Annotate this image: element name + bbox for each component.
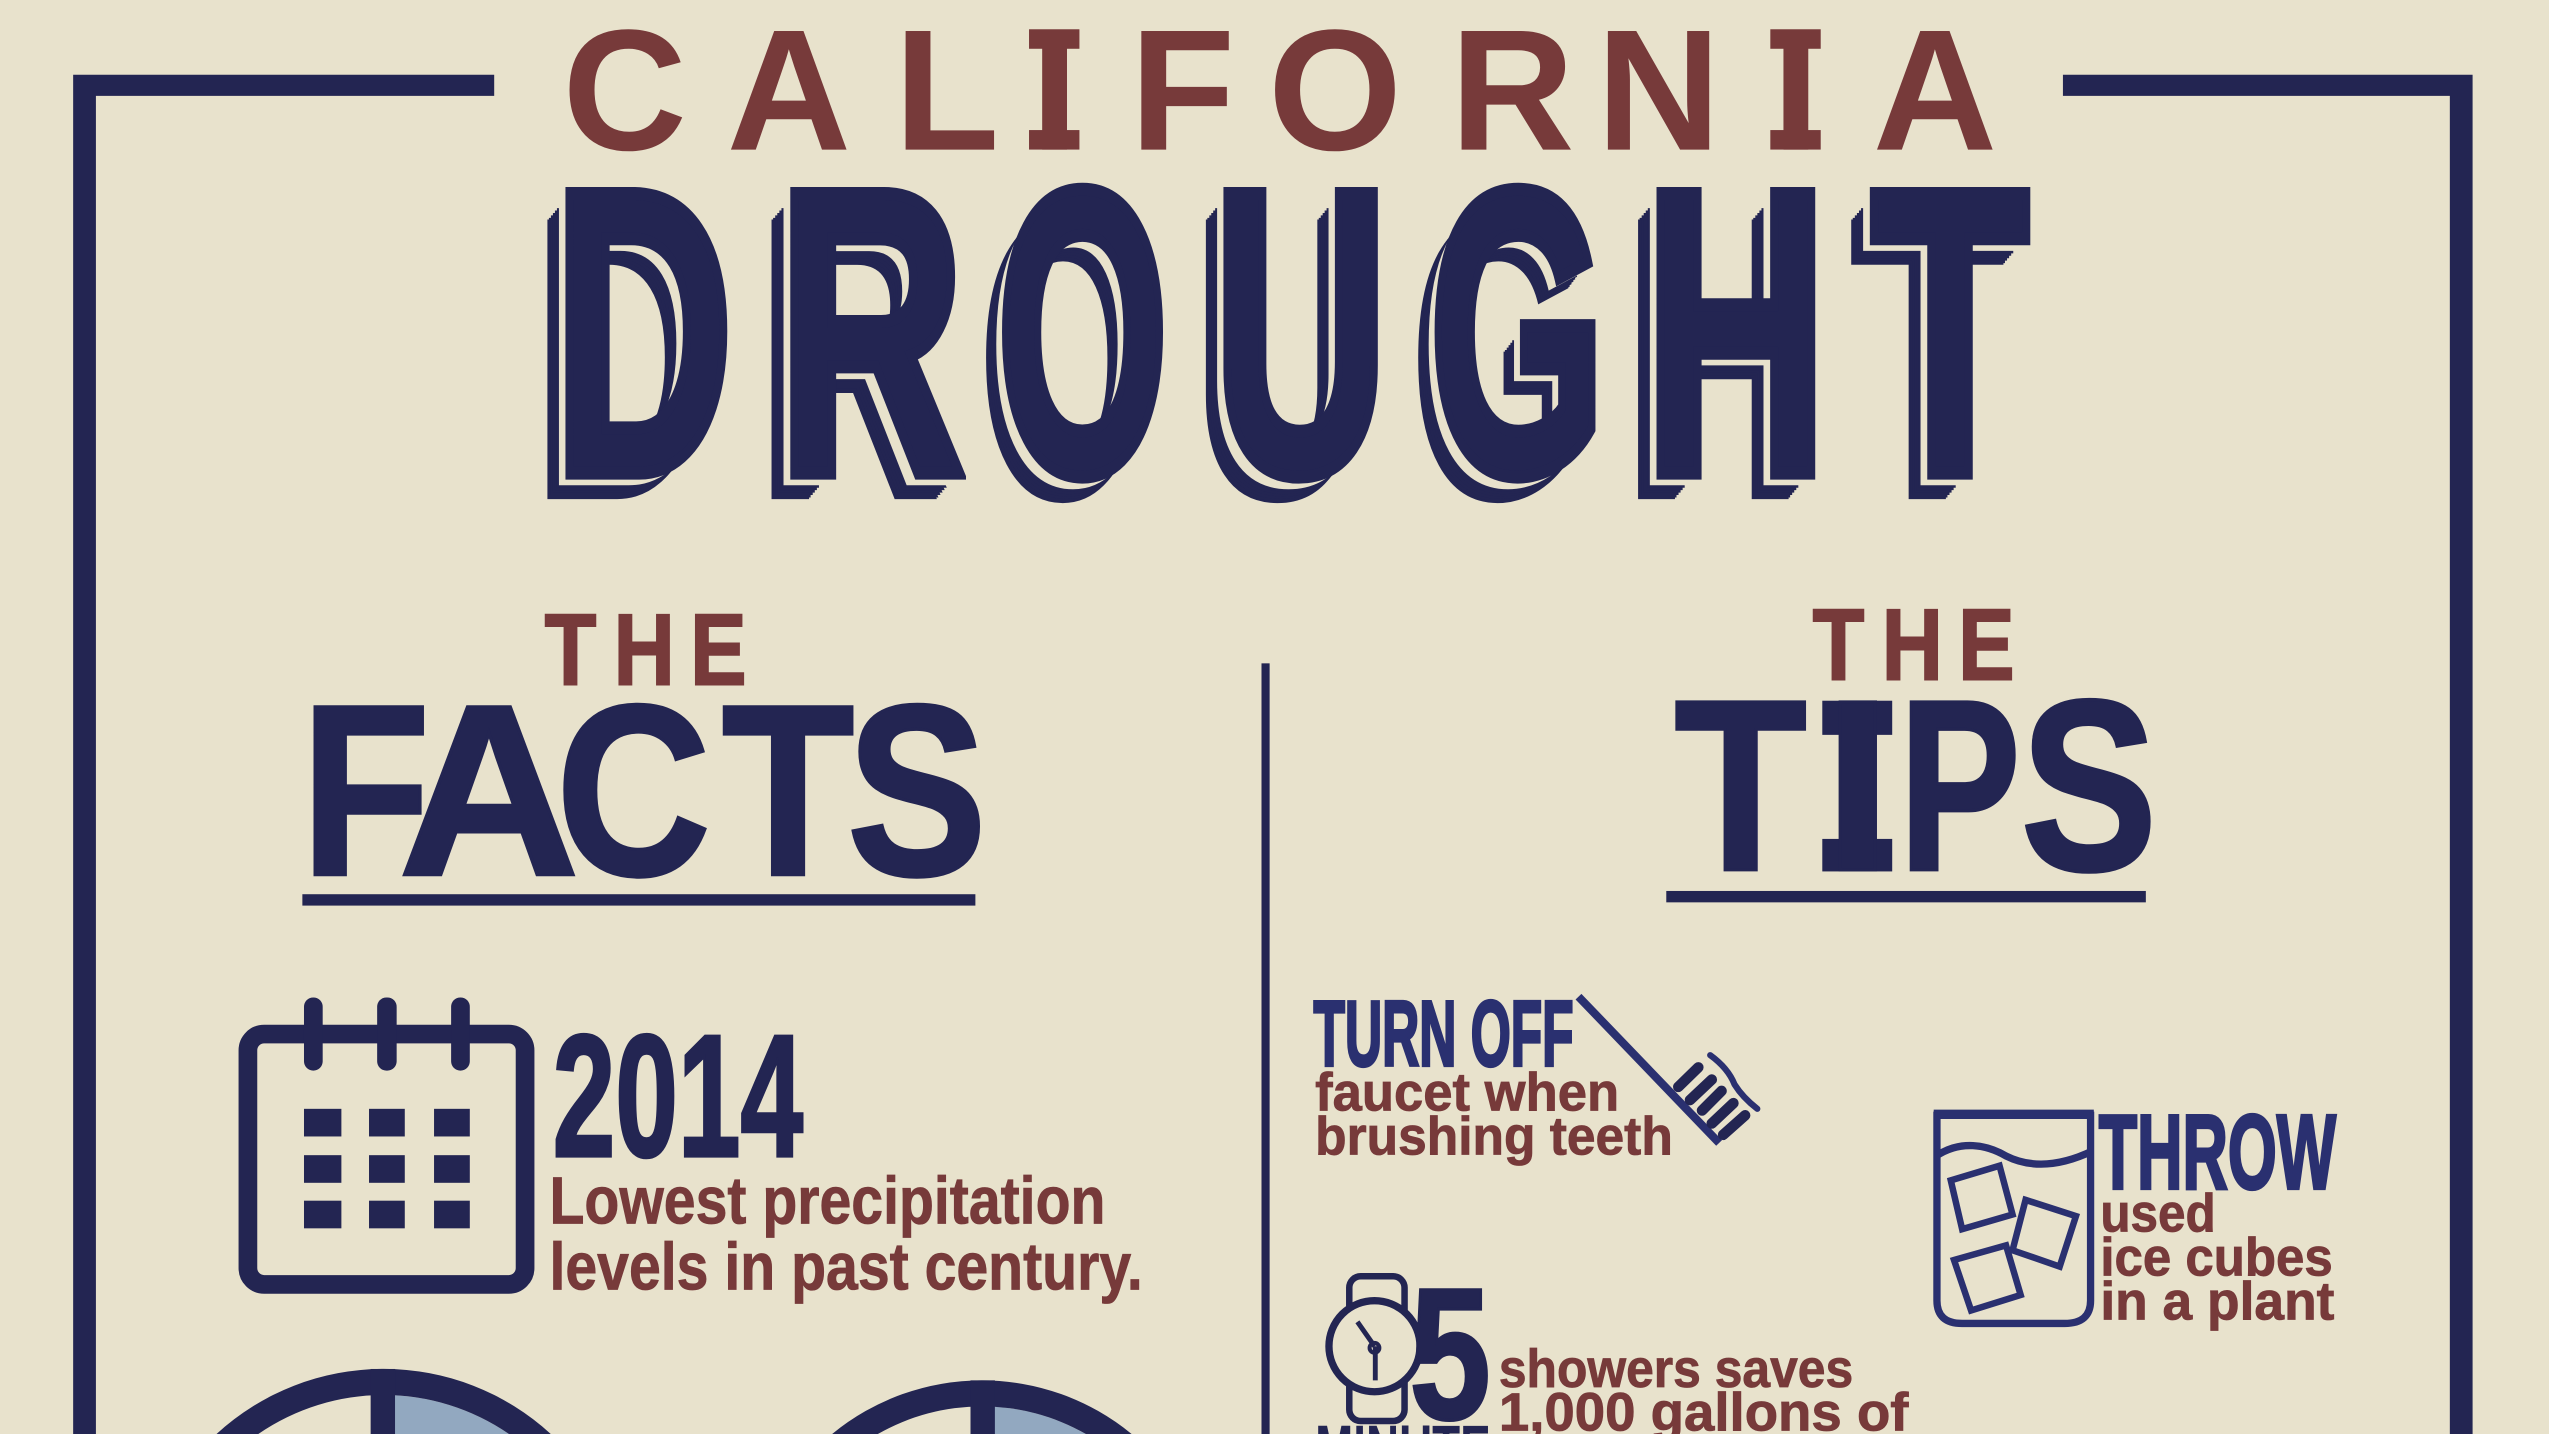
title: Drought: D xyxy=(553,106,734,560)
tip: turn off faucet xyxy=(1314,982,1673,1166)
heading: Facts: T xyxy=(722,654,854,927)
heading: Facts: S xyxy=(847,654,987,927)
tips underline xyxy=(1666,891,2146,902)
title: Drought: G xyxy=(1429,106,1606,560)
heading: The (facts): THE xyxy=(545,594,747,706)
heading: Facts: C xyxy=(556,654,711,927)
title: Drought: T xyxy=(1871,106,2029,560)
decorative frame: right xyxy=(2063,75,2473,1434)
column divider xyxy=(1261,663,1270,1434)
facts underline xyxy=(302,894,975,906)
title: Drought xyxy=(547,106,2030,560)
heading: Tips: S xyxy=(2021,649,2157,922)
tip: throw ice cubes: THROW xyxy=(2099,1093,2336,1211)
heading: The (tips): THE xyxy=(1813,589,2015,701)
tip: 5 minute showers: showers saves xyxy=(1499,1339,1853,1399)
tip: throw ice cubes: ice cubes xyxy=(2100,1227,2333,1287)
tip: turn off faucet: TURN OFF xyxy=(1314,982,1574,1086)
heading: Facts: F xyxy=(301,654,430,927)
icon: calendar xyxy=(248,997,525,1284)
heading: Facts: A xyxy=(398,654,580,927)
fact text: lowest precipitation: levels in past century. xyxy=(549,1230,1143,1304)
icon: toothbrush xyxy=(1578,997,1757,1143)
decorative frame: left xyxy=(73,75,494,1434)
tip: throw ice cubes: in a plant xyxy=(2100,1271,2335,1331)
heading: Tips: I xyxy=(1824,649,1892,922)
title: Drought: U xyxy=(1213,106,1389,560)
heading: Facts xyxy=(301,654,987,927)
title: Drought: O xyxy=(996,106,1169,560)
icon: wristwatch xyxy=(1329,1276,1420,1421)
stat: 2014: 2014 xyxy=(553,999,803,1193)
fact text: lowest precipitation: Lowest precipitation xyxy=(549,1164,1105,1238)
title: Drought: R xyxy=(777,106,965,560)
tip: turn off faucet: faucet when xyxy=(1315,1062,1619,1122)
pie chart: left xyxy=(217,1369,551,1434)
tip: turn off faucet: brushing teeth xyxy=(1315,1106,1673,1166)
icon: glass with ice cubes xyxy=(1934,1114,2094,1323)
tip: 5 minute showers xyxy=(1315,1250,1909,1434)
heading: Tips: P xyxy=(1899,649,2021,922)
tip: throw ice cubes: used xyxy=(2100,1184,2216,1244)
pie chart: right xyxy=(832,1380,1132,1434)
heading: Tips: T xyxy=(1674,649,1807,922)
heading: Tips xyxy=(1674,649,2157,922)
fact text: lowest precipitation xyxy=(549,1164,1143,1304)
tip: throw ice cubes xyxy=(2099,1093,2336,1331)
title: Drought: H xyxy=(1643,106,1828,560)
